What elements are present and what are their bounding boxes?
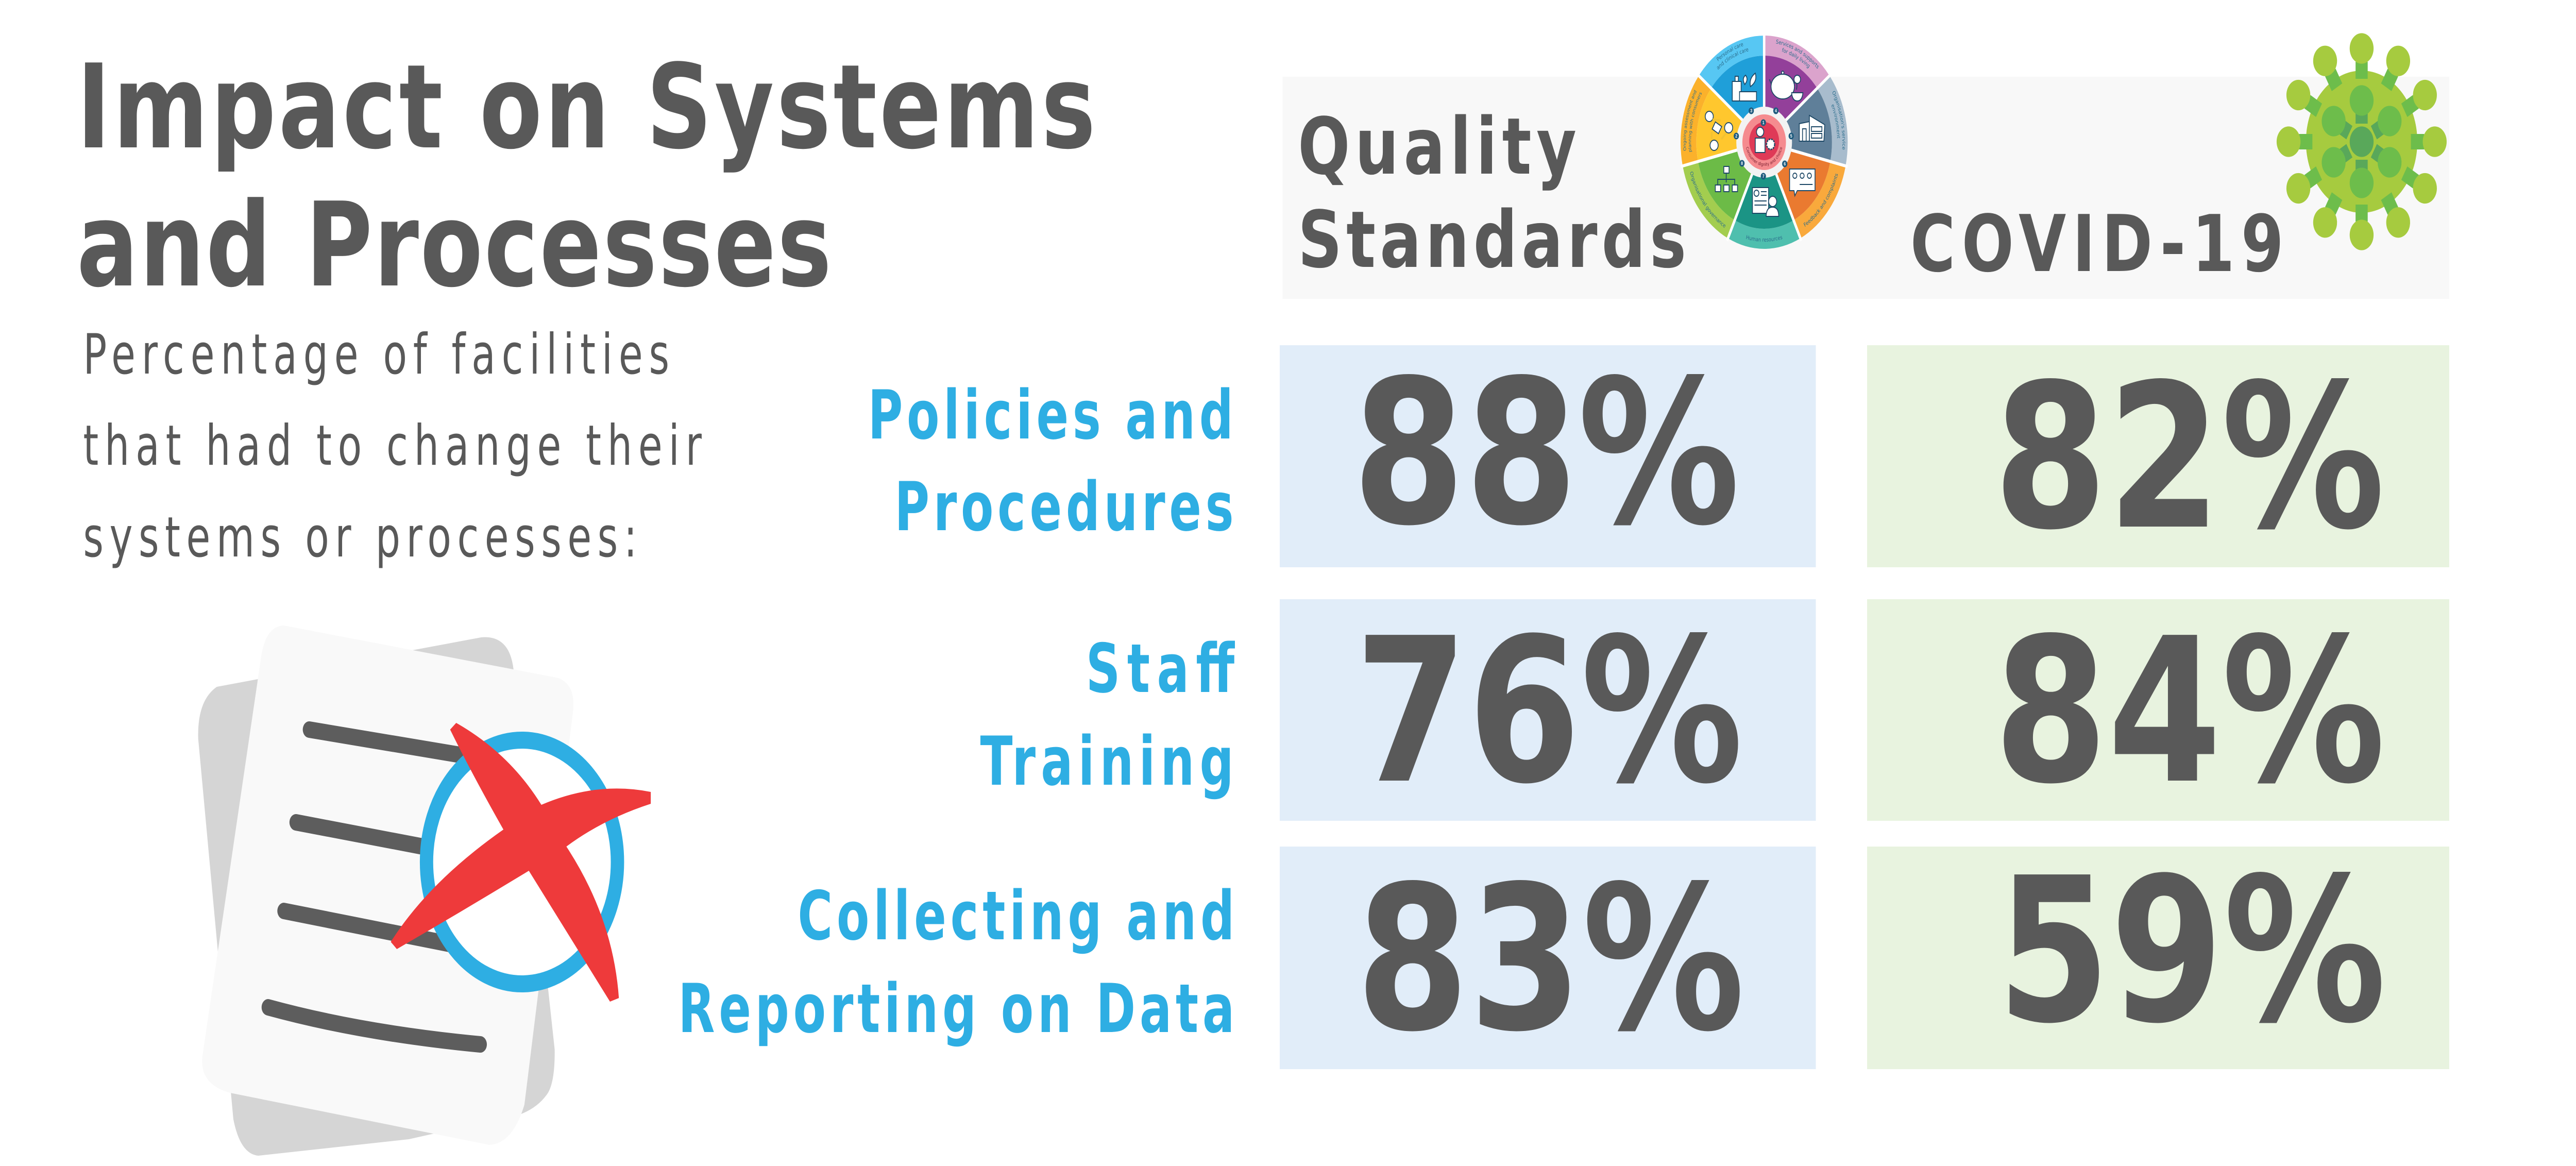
panel: Staff Training COVID-19 84% [1867, 595, 2449, 828]
wheel number badges: 3 [1750, 108, 1753, 113]
row label: Collecting and Reporting on Data: Reporting on Data [678, 970, 1234, 1048]
title [77, 40, 1096, 313]
wheel icon: people around table [1705, 111, 1733, 150]
wheel sector labels: planning with consumers [1688, 92, 1702, 152]
wheel sector labels: for daily living [1782, 48, 1810, 69]
heading: COVID-19: COVID-19 [1910, 199, 2284, 290]
panel: Data Quality Standards 83%: 83% [1356, 843, 1745, 1076]
wheel sector labels: environment [1832, 105, 1840, 139]
wheel sector labels: Feedback and complaints [1803, 173, 1838, 227]
panel: column headers [1282, 77, 2449, 299]
red cross [391, 723, 651, 1002]
virus body [2306, 71, 2417, 213]
wheel sector labels: Human resources [1746, 235, 1783, 242]
panel: Staff Training Quality Standards 76%: 76% [1355, 595, 1743, 828]
title: Impact on Systems [77, 40, 1096, 175]
icon: document with red cross [198, 626, 651, 1156]
blue ring [427, 740, 617, 984]
wheel icon: care products [1732, 73, 1756, 101]
panel: Staff Training Quality Standards 76% [1280, 595, 1816, 828]
wheel number badges: 1 [1762, 120, 1765, 125]
wheel sector labels: Personal care [1717, 43, 1743, 61]
heading: Quality Standards: Quality [1298, 102, 1577, 193]
heading: Quality Standards [1298, 102, 1686, 286]
row label: Collecting and Reporting on Data [678, 877, 1234, 1048]
subtitle text block: systems or processes: [83, 505, 637, 570]
heading: Quality Standards: Standards [1298, 195, 1686, 286]
subtitle text block: that had to change their [83, 413, 702, 478]
panel: Policies COVID-19 82% [1867, 341, 2449, 574]
row label: Collecting and Reporting on Data: Collecting and [798, 877, 1234, 955]
wheel number badges: 7 [1762, 174, 1765, 179]
row label: Staff Training: Staff [1086, 630, 1235, 708]
icon: COVID-19 virus [2277, 33, 2447, 250]
wheel sector labels: Ongoing assessment and [1683, 90, 1697, 150]
virus inner nodes [2317, 85, 2406, 198]
wheel icon: consumer with gear [1755, 127, 1775, 153]
wheel icon: building [1799, 115, 1825, 141]
panel: Data COVID-19 59% [1867, 835, 2449, 1069]
icon: quality standards wheel [1681, 36, 1848, 249]
panel: Data Quality Standards 83% [1280, 843, 1816, 1076]
wheel sector labels [1683, 39, 1845, 242]
wheel number badges: 8 [1741, 161, 1743, 166]
row label: Staff Training [980, 630, 1235, 801]
title: and Processes [77, 178, 832, 313]
row label: Staff Training: Training [980, 722, 1234, 801]
wheel sectors [1668, 10, 1870, 275]
wheel sector labels: Services and supports [1776, 39, 1819, 69]
subtitle text block [83, 322, 702, 570]
wheel sector labels: Organisation's service [1833, 91, 1845, 149]
wheel icon: organisation chart [1715, 166, 1738, 192]
back sheet [198, 637, 555, 1156]
row label: Policies and Procedures: Policies and [868, 376, 1233, 454]
wheel number badges: 6 [1784, 161, 1786, 166]
wheel number badges: 4 [1775, 108, 1777, 113]
wheel number badges [1734, 107, 1794, 179]
panel: Staff Training COVID-19 84%: 84% [1994, 595, 2385, 828]
front sheet [202, 626, 573, 1145]
row label: Policies and Procedures [868, 376, 1234, 546]
wheel number badges: 2 [1735, 133, 1738, 139]
wheel number badges: 5 [1790, 133, 1792, 139]
row label: Policies and Procedures: Procedures [894, 468, 1234, 546]
subtitle text block: Percentage of facilities [83, 322, 669, 387]
wheel icon: feedback speech bubble [1790, 169, 1815, 196]
wheel icon: teapot and cup [1769, 71, 1803, 101]
panel: Policies Quality Standards 88%: 88% [1352, 337, 1740, 570]
wheel sector labels: Organisational governance [1690, 172, 1725, 228]
wheel sector labels: Consumer dignity and choice [1747, 147, 1783, 167]
wheel hub [1736, 107, 1792, 178]
virus spikes [2277, 33, 2447, 250]
wheel icon: staff document [1753, 188, 1778, 216]
panel: Policies COVID-19 82%: 82% [1993, 341, 2385, 574]
panel: Data COVID-19 59%: 59% [1997, 835, 2386, 1068]
wheel sector labels: and clinical care [1717, 48, 1749, 70]
text lines [268, 730, 480, 1044]
panel: Policies Quality Standards 88% [1280, 337, 1816, 570]
